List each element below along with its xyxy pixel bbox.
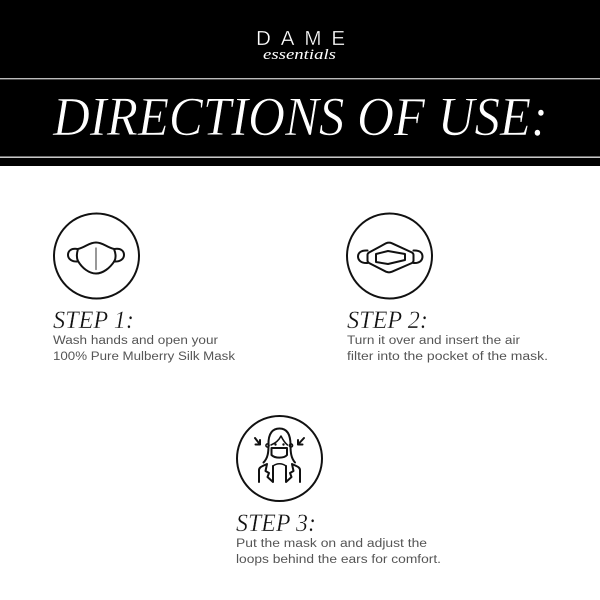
step 3 heading: STEP 3: [236,510,316,537]
step 1 text: 100% Pure Mulberry Silk Mask [53,351,235,363]
brand logo [256,27,345,63]
step 1 heading: STEP 1: [53,307,134,334]
brand logo: essentials [263,47,336,63]
step 2 text: filter into the pocket of the mask. [347,351,548,363]
brand logo: DAME [256,27,345,50]
header band [0,0,600,166]
step 1 text [53,335,235,363]
title: DIRECTIONS OF USE: [52,86,548,147]
icon: mask front [54,214,139,298]
step 3 text: Put the mask on and adjust the [236,538,427,550]
step 2 text: Turn it over and insert the air [347,335,520,347]
step 3 text [236,538,441,566]
panel: step 1 [53,214,235,363]
step 2 heading: STEP 2: [347,307,428,334]
step 3 text: loops behind the ears for comfort. [236,554,441,566]
icon: mask back with filter [347,214,432,298]
step 2 text [347,335,548,363]
step 1 text: Wash hands and open your [53,335,218,347]
panel: step 2 [347,214,548,363]
panel: step 3 [236,416,441,566]
icon: person wearing mask [237,416,322,501]
